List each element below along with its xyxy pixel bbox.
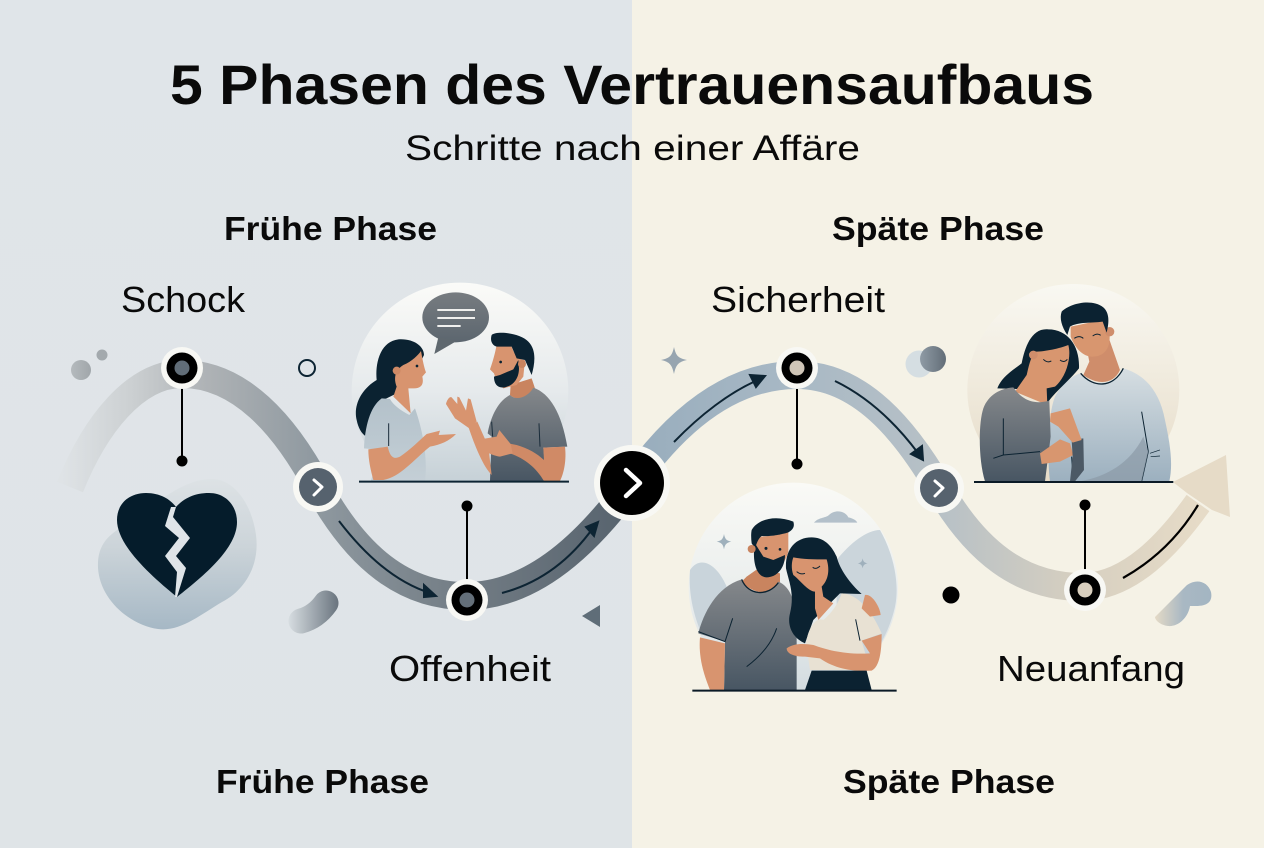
connector: Schock: [176, 385, 188, 466]
label: Schock: Schock: [121, 279, 246, 320]
heading: Späte Phase top: Späte Phase: [832, 210, 1044, 247]
woman in grey sweater: [980, 329, 1084, 481]
node: Neuanfang: [1064, 569, 1106, 611]
background: right panel: [632, 0, 1264, 848]
chevron node left: [293, 462, 343, 512]
node: Sicherheit: [776, 347, 818, 389]
connector: Neuanfang: [1080, 500, 1090, 575]
woman with long hair: [786, 537, 882, 690]
label: Neuanfang: Neuanfang: [997, 648, 1185, 689]
woman: [356, 339, 456, 481]
chevron node center: [594, 445, 670, 521]
ribbon arrowhead: [1173, 455, 1230, 517]
man in tee: [698, 518, 797, 690]
connector: Offenheit: [462, 500, 472, 585]
node: Offenheit: [446, 579, 488, 621]
icon: broken heart on blob: [98, 479, 257, 629]
subtitle: Schritte nach einer Affäre: [405, 129, 860, 168]
title: 5 Phasen des Vertrauensaufbaus: [170, 53, 1094, 116]
flow arrow 4: [835, 381, 923, 460]
label: Offenheit: Offenheit: [389, 648, 551, 689]
ribbon: early phase: [70, 374, 632, 596]
man in light sweater: [1048, 303, 1171, 481]
decorative shapes right: [661, 346, 1211, 626]
label: Sicherheit: Sicherheit: [711, 279, 885, 320]
illustration: couple embracing: [689, 483, 898, 692]
flow arrow 2: [502, 522, 598, 593]
heading: Frühe Phase top: Frühe Phase: [224, 210, 437, 247]
speech bubble: [422, 292, 489, 354]
decorative shapes left: [71, 350, 600, 627]
journey ribbon: [70, 374, 1230, 596]
illustration: couple leaning together: [967, 284, 1179, 496]
heading: Späte Phase bottom: Späte Phase: [843, 763, 1055, 800]
flow arrow 1: [339, 521, 436, 597]
heading: Frühe Phase bottom: Frühe Phase: [216, 763, 429, 800]
chevron node right: [914, 463, 964, 513]
ribbon: late phase: [632, 375, 1198, 587]
hills, cloud and sparkles: [690, 511, 897, 660]
connector: Sicherheit: [792, 385, 802, 470]
man: [446, 333, 567, 481]
background: left panel: [0, 0, 632, 848]
flow arrow 3: [674, 375, 765, 442]
flow arrow 5: [1123, 505, 1198, 578]
node: Schock: [161, 347, 203, 389]
illustration: couple talking: [352, 283, 569, 499]
